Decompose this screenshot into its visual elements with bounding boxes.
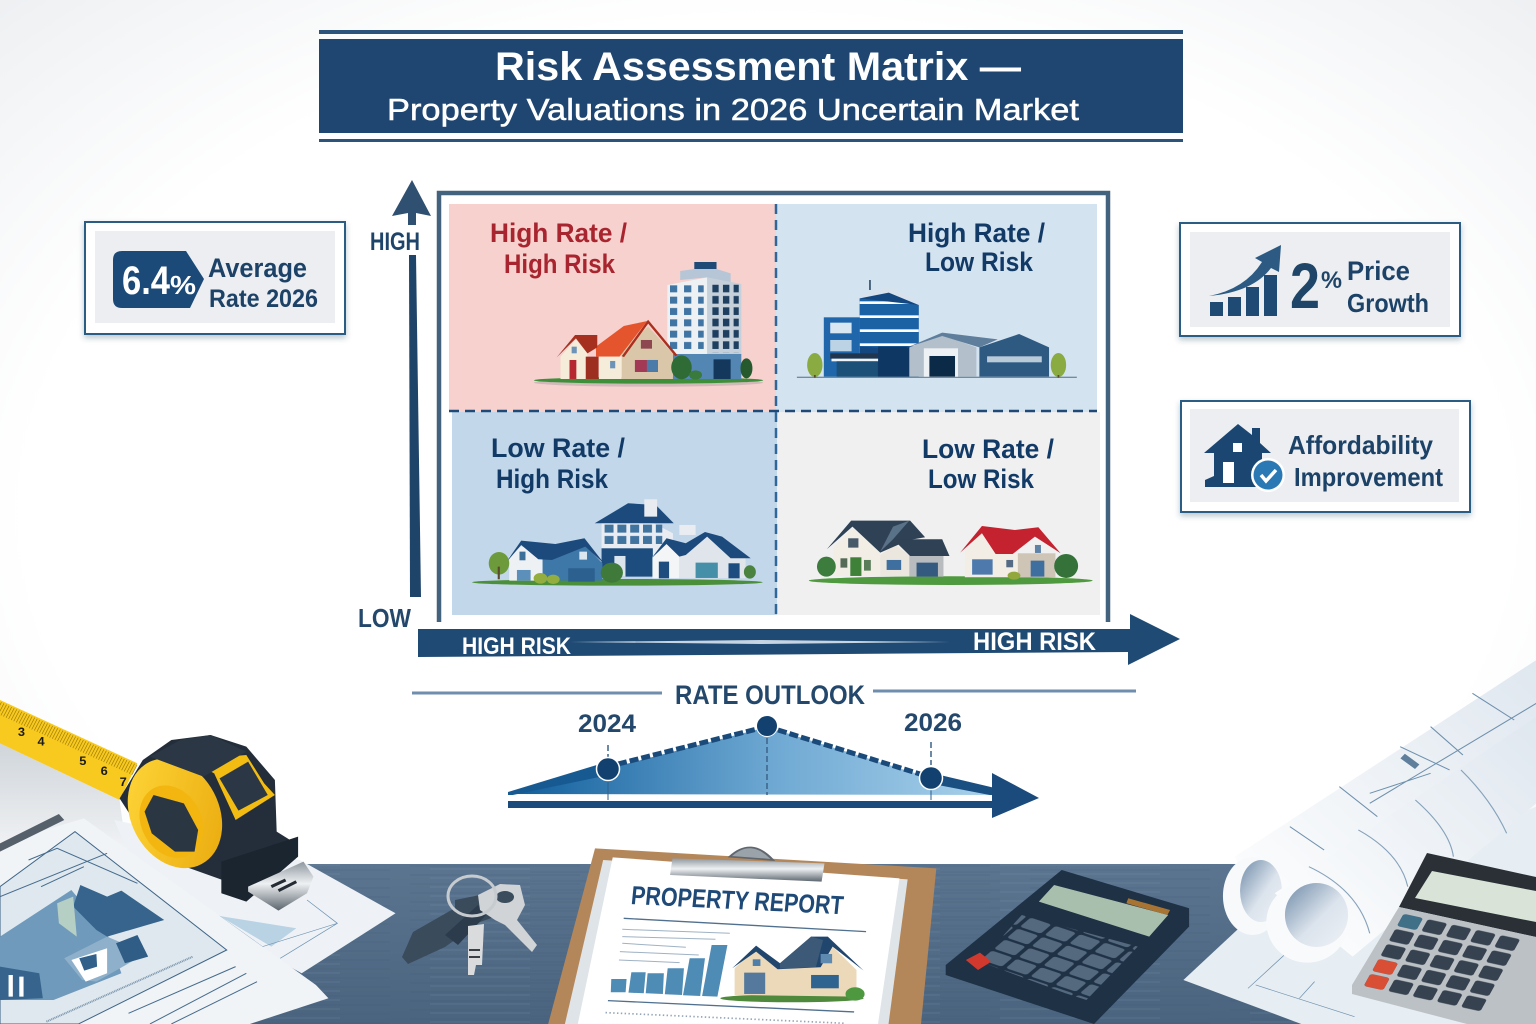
quadrant: high rate / high risk — [449, 204, 776, 412]
quadrant: high rate / low risk — [776, 204, 1097, 412]
callout: price growth — [1180, 223, 1460, 336]
white calculator — [1352, 853, 1536, 1024]
heading: rate outlook: RATE OUTLOOK — [675, 680, 865, 710]
desk surface — [0, 864, 1536, 1024]
quadrant: high rate / high risk: High Rate / — [490, 218, 627, 248]
badge: 6.4%: % — [170, 270, 196, 300]
title banner — [319, 30, 1183, 142]
quadrant: high rate / low risk: Low Risk — [925, 247, 1034, 277]
label: price growth: Growth — [1347, 288, 1429, 318]
axis label: high risk left: HIGH RISK — [462, 633, 572, 660]
risk matrix — [439, 193, 1108, 622]
axis label: high risk right: HIGH RISK — [973, 628, 1096, 656]
report bar chart — [611, 945, 727, 997]
quadrant: low rate / low risk — [777, 412, 1100, 615]
title: Risk Assessment Matrix — — [495, 45, 1021, 89]
blueprint sheet — [0, 814, 328, 1024]
rate curve — [508, 716, 1039, 818]
illustration: two detached houses — [809, 521, 1093, 585]
calculator — [946, 870, 1189, 1024]
year: 2026: 2026 — [904, 709, 962, 737]
rate outlook chart — [412, 680, 1136, 818]
tape measure: 4 — [37, 735, 45, 748]
illustration: suburban houses — [472, 499, 763, 586]
axis label: high: HIGH — [370, 228, 420, 256]
quadrant: high rate / low risk: High Rate / — [908, 218, 1045, 248]
icon: house with check — [1204, 424, 1285, 492]
clip — [670, 847, 824, 882]
callout: average rate — [85, 222, 345, 334]
illustration: house and apartment tower — [534, 262, 763, 387]
subtitle: Property Valuations in 2026 Uncertain Market — [387, 92, 1079, 127]
label: price growth: Price — [1347, 256, 1410, 286]
icon: rising bars and arrow — [1209, 245, 1281, 316]
plan sheet — [1183, 807, 1536, 1024]
label: affordability improvement — [1288, 430, 1443, 492]
quadrant: low rate / low risk: Low Risk — [928, 464, 1035, 494]
value: 2% — [1290, 250, 1342, 322]
blueprint roll back — [1223, 660, 1536, 935]
illustration: offices and warehouses — [797, 280, 1077, 378]
badge: 6.4% — [113, 251, 204, 308]
callout: affordability — [1181, 401, 1470, 512]
label: average rate 2026: Rate 2026 — [209, 285, 318, 313]
tape measure: 3 — [18, 725, 25, 739]
keys — [402, 876, 537, 975]
label: affordability improvement: Affordability — [1288, 430, 1434, 460]
axis label: low: LOW — [358, 603, 411, 633]
quadrant: high rate / high risk: High Risk — [504, 249, 616, 279]
quadrant: low rate / high risk — [452, 412, 777, 615]
right desk items — [946, 660, 1536, 1024]
left desk items — [0, 700, 396, 1024]
blueprint roll front — [1266, 717, 1536, 963]
tape measure — [0, 700, 313, 911]
tape measure: 7 — [120, 775, 127, 789]
clipboard: property report — [548, 847, 936, 1024]
tape measure: 6 — [101, 764, 108, 778]
quadrant: low rate / high risk: Low Rate / — [491, 433, 625, 463]
quadrant: low rate / high risk: High Risk — [496, 464, 609, 494]
tape measure: 5 — [79, 754, 86, 768]
value: 2%: % — [1321, 267, 1342, 294]
report house — [720, 937, 865, 1002]
quadrant: low rate / low risk: Low Rate / — [922, 434, 1054, 464]
year: 2024: 2024 — [578, 710, 636, 738]
report title: PROPERTY REPORT — [630, 881, 845, 920]
label: average rate 2026 — [208, 253, 318, 313]
badge: 6.4%: 6.4 — [122, 259, 171, 303]
back plan sheet — [114, 820, 396, 973]
label: price growth — [1347, 256, 1429, 318]
x axis arrow — [418, 614, 1180, 665]
label: affordability improvement: Improvement — [1294, 462, 1443, 492]
value: 2%: 2 — [1290, 250, 1320, 322]
report lines — [619, 929, 730, 963]
y axis arrow — [370, 180, 431, 597]
label: average rate 2026: Average — [208, 253, 307, 283]
